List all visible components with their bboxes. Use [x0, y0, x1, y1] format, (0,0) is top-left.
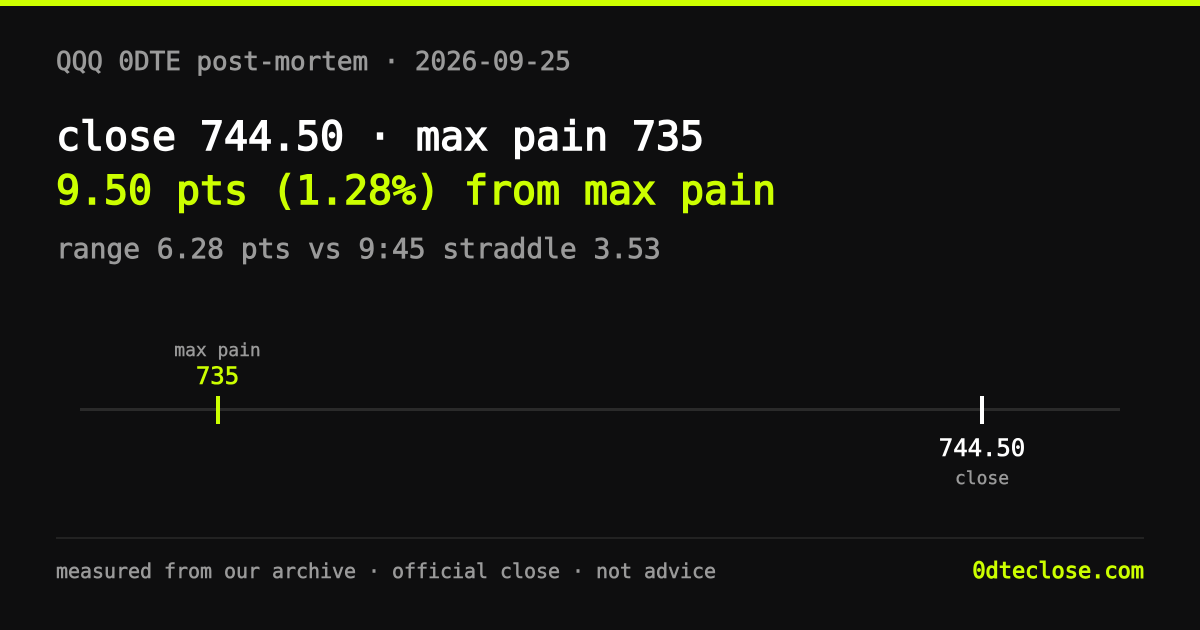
- footer site name: 0dteclose.com: [972, 559, 1144, 584]
- range versus straddle text: range 6.28 pts vs 9:45 straddle 3.53: [56, 232, 661, 265]
- footer disclaimer: measured from our archive · official close · not advice: [56, 559, 716, 583]
- price axis chart: [80, 340, 1120, 489]
- eyebrow heading: QQQ 0DTE post-mortem · 2026-09-25: [56, 47, 571, 77]
- max pain label: max pain: [174, 340, 261, 361]
- close label: close: [955, 468, 1009, 489]
- footer divider: [56, 537, 1144, 539]
- max pain tick: [216, 396, 220, 424]
- title: distance from max pain: 9.50 pts (1.28%) from max pain: [56, 168, 776, 214]
- close value: 744.50: [939, 434, 1025, 462]
- close tick: [980, 396, 984, 424]
- max pain value: 735: [196, 362, 239, 390]
- axis line: [80, 408, 1120, 411]
- title: close and max pain: close 744.50 · max pain 735: [56, 114, 704, 160]
- top accent bar: [0, 0, 1200, 6]
